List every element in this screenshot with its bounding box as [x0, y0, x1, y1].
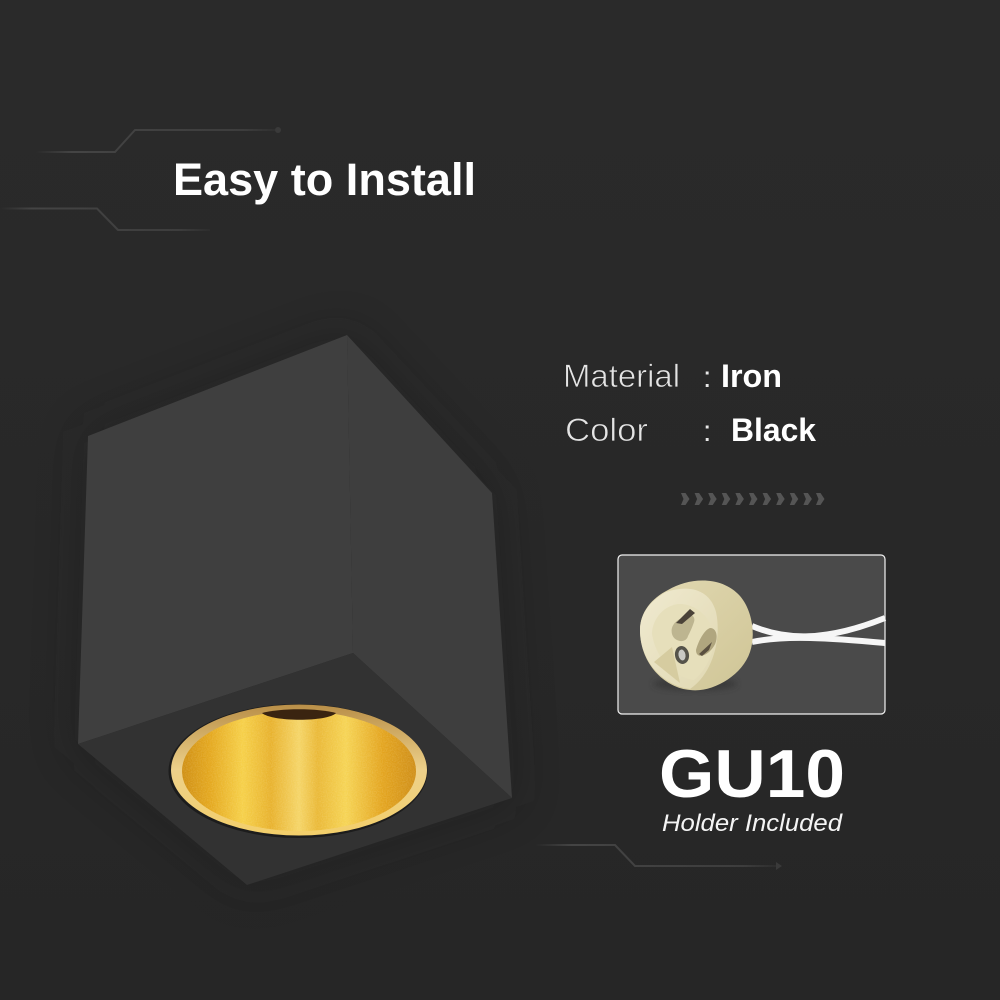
- circuit line: bottom: [535, 845, 782, 870]
- circuit lines: top left: [0, 127, 281, 230]
- pin holes: [672, 615, 694, 641]
- specification: color: :: [703, 415, 711, 448]
- specification: color: [565, 412, 816, 448]
- gold reflector: [168, 704, 428, 838]
- bottom face: [78, 653, 512, 885]
- holder included caption: Holder Included: [662, 810, 843, 837]
- wires: [752, 618, 885, 643]
- ceramic socket: [640, 581, 753, 691]
- specification: color: Black: [731, 412, 816, 448]
- specification: material: :: [703, 361, 711, 394]
- specification: material: Iron: [721, 358, 782, 394]
- holder photo panel: [618, 555, 885, 714]
- notch: [654, 647, 680, 683]
- GU10 label: GU10: [659, 736, 845, 812]
- right face: [347, 335, 512, 798]
- left face: [78, 335, 353, 744]
- product: square ceiling spotlight: [78, 335, 512, 885]
- specification: color: Color: [565, 412, 648, 448]
- product shadow: [74, 330, 516, 889]
- specification: material: Material: [563, 358, 680, 394]
- title: Easy to Install: [173, 154, 476, 205]
- chevron row: [681, 493, 824, 505]
- specification: material: [563, 358, 782, 394]
